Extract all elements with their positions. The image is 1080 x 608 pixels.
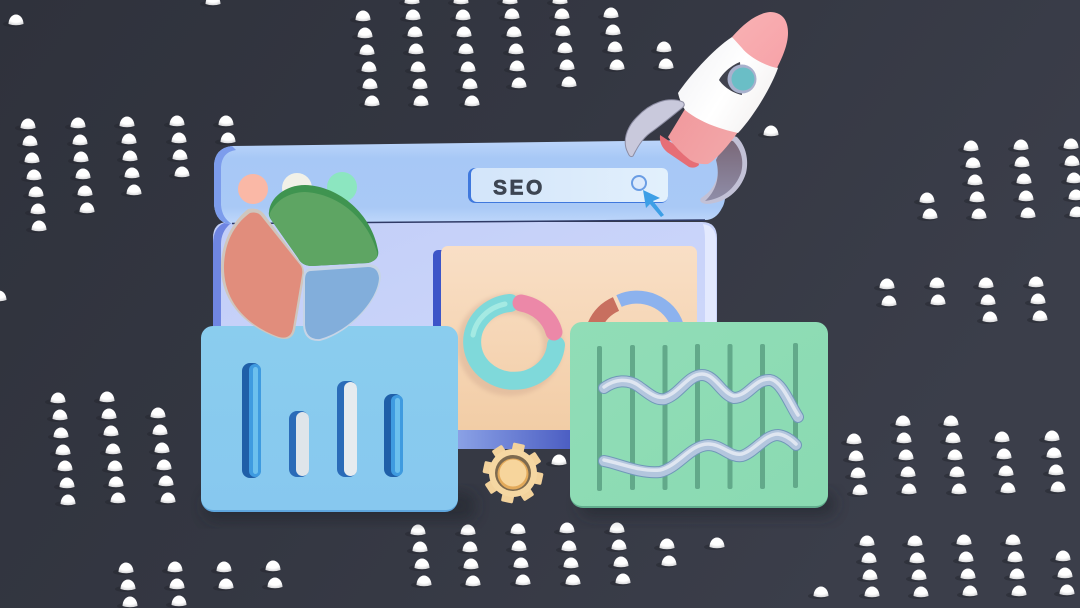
search box — [468, 168, 668, 203]
pie chart — [221, 185, 381, 341]
window bottom band — [456, 429, 574, 449]
bar 3 — [337, 381, 357, 477]
blue slice — [303, 264, 381, 341]
dot field: lower right — [808, 416, 1074, 599]
cast shadows — [205, 492, 835, 520]
dot field: bottom center — [405, 454, 724, 588]
dot field: upper right — [874, 138, 1080, 324]
green slice — [269, 185, 378, 266]
pink segment — [521, 303, 554, 332]
salmon slice — [221, 209, 304, 339]
rocket right fin — [700, 134, 747, 204]
bar 1 — [242, 363, 261, 478]
donut chart: left — [467, 303, 556, 386]
dot field: lower left — [45, 392, 282, 608]
lower line — [604, 434, 796, 472]
donut chart: right — [595, 297, 677, 325]
search icon — [632, 176, 646, 190]
rocket window — [719, 62, 756, 95]
browser top bar — [214, 140, 726, 224]
dot field: upper left — [0, 116, 236, 303]
grid lines — [597, 343, 798, 491]
panel: line chart — [570, 322, 828, 508]
window controls — [238, 172, 357, 204]
content panel: peach — [433, 246, 697, 430]
cursor arrow — [643, 190, 664, 217]
rocket tail section — [668, 109, 738, 164]
panel: bar chart — [201, 326, 458, 512]
rocket skirt — [660, 135, 699, 168]
bar 2 — [289, 411, 309, 477]
rocket nose — [732, 12, 788, 68]
browser window body — [213, 222, 717, 449]
icon: gear — [477, 437, 549, 509]
rocket left fin — [625, 100, 684, 157]
bar 4 — [384, 394, 403, 477]
dot field: top center — [3, 0, 778, 138]
rocket hull — [678, 37, 778, 133]
upper line — [604, 374, 798, 417]
search label: SEO — [493, 176, 545, 200]
icon: rocket — [625, 12, 788, 204]
